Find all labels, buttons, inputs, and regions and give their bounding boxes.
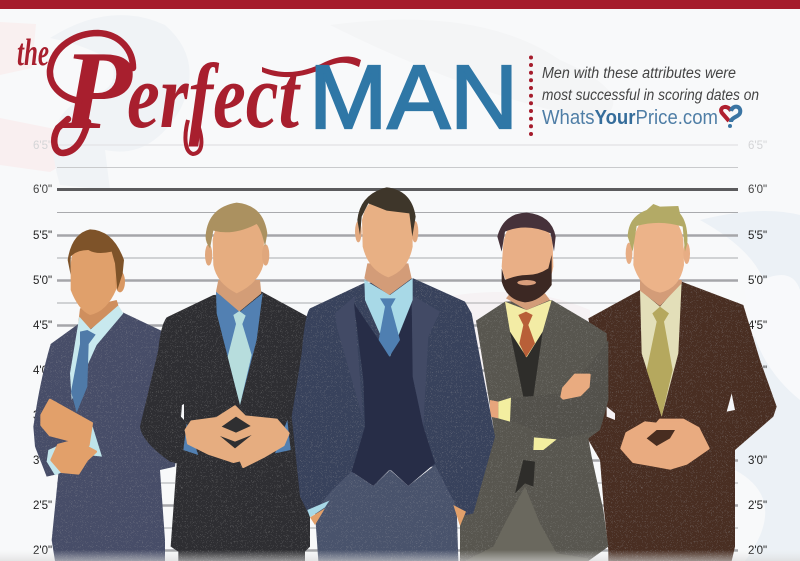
- man 3 suit: [292, 278, 495, 517]
- man 3 vest: [352, 303, 435, 486]
- man 3 cuffs and hands: [307, 501, 329, 517]
- height labels right: 2'5": [748, 500, 767, 512]
- height labels right: 2'0": [748, 545, 767, 557]
- man 2 head: [213, 213, 264, 293]
- man 1 suit: [33, 313, 177, 561]
- man 4 suit: [460, 300, 608, 561]
- man 3 trousers: [315, 465, 458, 561]
- man 3 head: [362, 195, 413, 277]
- height labels left: 3'5": [33, 410, 52, 422]
- brand: WhatsYourPrice.com: WhatsYourPrice.com: [542, 106, 718, 129]
- man 5: brown suit, blond spiky hair: [588, 204, 777, 561]
- man 5 tie: [647, 307, 673, 417]
- title: the Perfect: [17, 29, 361, 154]
- man 4 shirt: [505, 300, 552, 357]
- man 2 hair: [206, 203, 267, 248]
- height labels right: 3'0": [748, 455, 767, 467]
- the: the: [17, 32, 49, 74]
- height ruler lines: [57, 145, 738, 550]
- man 3 gaps: [325, 450, 458, 468]
- height labels left: 3'0": [33, 455, 52, 467]
- height labels left: 2'5": [33, 500, 52, 512]
- height labels right: 5'0": [748, 275, 767, 287]
- man 4 beard: [502, 255, 552, 302]
- height labels right: 4'0": [748, 365, 767, 377]
- man 5 hair: [628, 204, 687, 252]
- man 3 lapels: [335, 295, 363, 420]
- man 2 shirt: [216, 292, 263, 405]
- height labels right: 5'5": [748, 230, 767, 242]
- man 2 gap: [181, 404, 184, 420]
- man 5 head: [633, 213, 684, 293]
- height labels left: 2'0": [33, 545, 52, 557]
- height labels left: 5'0": [33, 275, 52, 287]
- tagline: [542, 65, 759, 104]
- man 4 trousers: [465, 487, 588, 561]
- man 1 tie: [71, 330, 96, 413]
- man 1 hair: [68, 229, 124, 290]
- title: MAN: MAN: [309, 48, 518, 148]
- height labels right: 4'5": [748, 320, 767, 332]
- man 1 hands and cuffs: [87, 423, 102, 457]
- man 4 arms: [510, 340, 608, 440]
- man 4 vest: [509, 328, 543, 397]
- height labels left: 4'0": [33, 365, 52, 377]
- man 4 neck: [506, 293, 550, 310]
- height labels right: [748, 140, 767, 557]
- erfect: erfect: [127, 45, 301, 147]
- man 1 neck: [78, 300, 119, 329]
- man 2 neck: [216, 280, 261, 312]
- height labels right: 6'5": [748, 140, 767, 152]
- man 2 hands: [183, 423, 198, 455]
- height labels left: 6'5": [33, 140, 52, 152]
- man 5 neck: [640, 280, 682, 306]
- height labels right: 3'5": [748, 410, 767, 422]
- dotted divider: [529, 56, 533, 136]
- man 4: grey suit, beard, crossed arms: [460, 213, 615, 561]
- man 3: navy three-piece suit, centre: [292, 187, 495, 561]
- man 4 tie: [518, 312, 535, 357]
- man 3 neck: [364, 263, 412, 295]
- man 1 head: [71, 237, 116, 315]
- man 3 hair: [357, 187, 416, 237]
- height labels left: 5'5": [33, 230, 52, 242]
- height labels left: 4'5": [33, 320, 52, 332]
- man 3 tie: [379, 298, 400, 357]
- man 5 gaps: [727, 393, 735, 412]
- man 5 suit: [588, 282, 777, 561]
- man 1 shirt: [70, 305, 123, 400]
- bottom fade: [0, 550, 800, 561]
- title swashes: [50, 33, 361, 154]
- man 2: charcoal suit, blond hair: [140, 203, 320, 561]
- man 2 tie: [228, 311, 252, 405]
- man 2 suit: [140, 292, 320, 561]
- icon: heart question mark: [721, 107, 740, 128]
- man 4 hair: [497, 213, 556, 252]
- top bar: [0, 0, 800, 9]
- man 1: blue suit, brown hair: [33, 229, 177, 561]
- height labels left: [33, 140, 52, 557]
- height labels right: 6'0": [748, 184, 767, 196]
- man 4 gap: [607, 407, 615, 420]
- man 4 head: [502, 218, 553, 295]
- tagline: most successful in scoring dates on: [542, 87, 759, 104]
- P of Perfect: P: [61, 29, 134, 153]
- height labels left: 6'0": [33, 184, 52, 196]
- man 4 cuffs and hands: [490, 400, 498, 418]
- man 3 shirt: [364, 278, 413, 357]
- man 5 hands: [622, 420, 708, 468]
- man 5 shirt: [640, 282, 682, 417]
- tagline: Men with these attributes were: [542, 65, 736, 82]
